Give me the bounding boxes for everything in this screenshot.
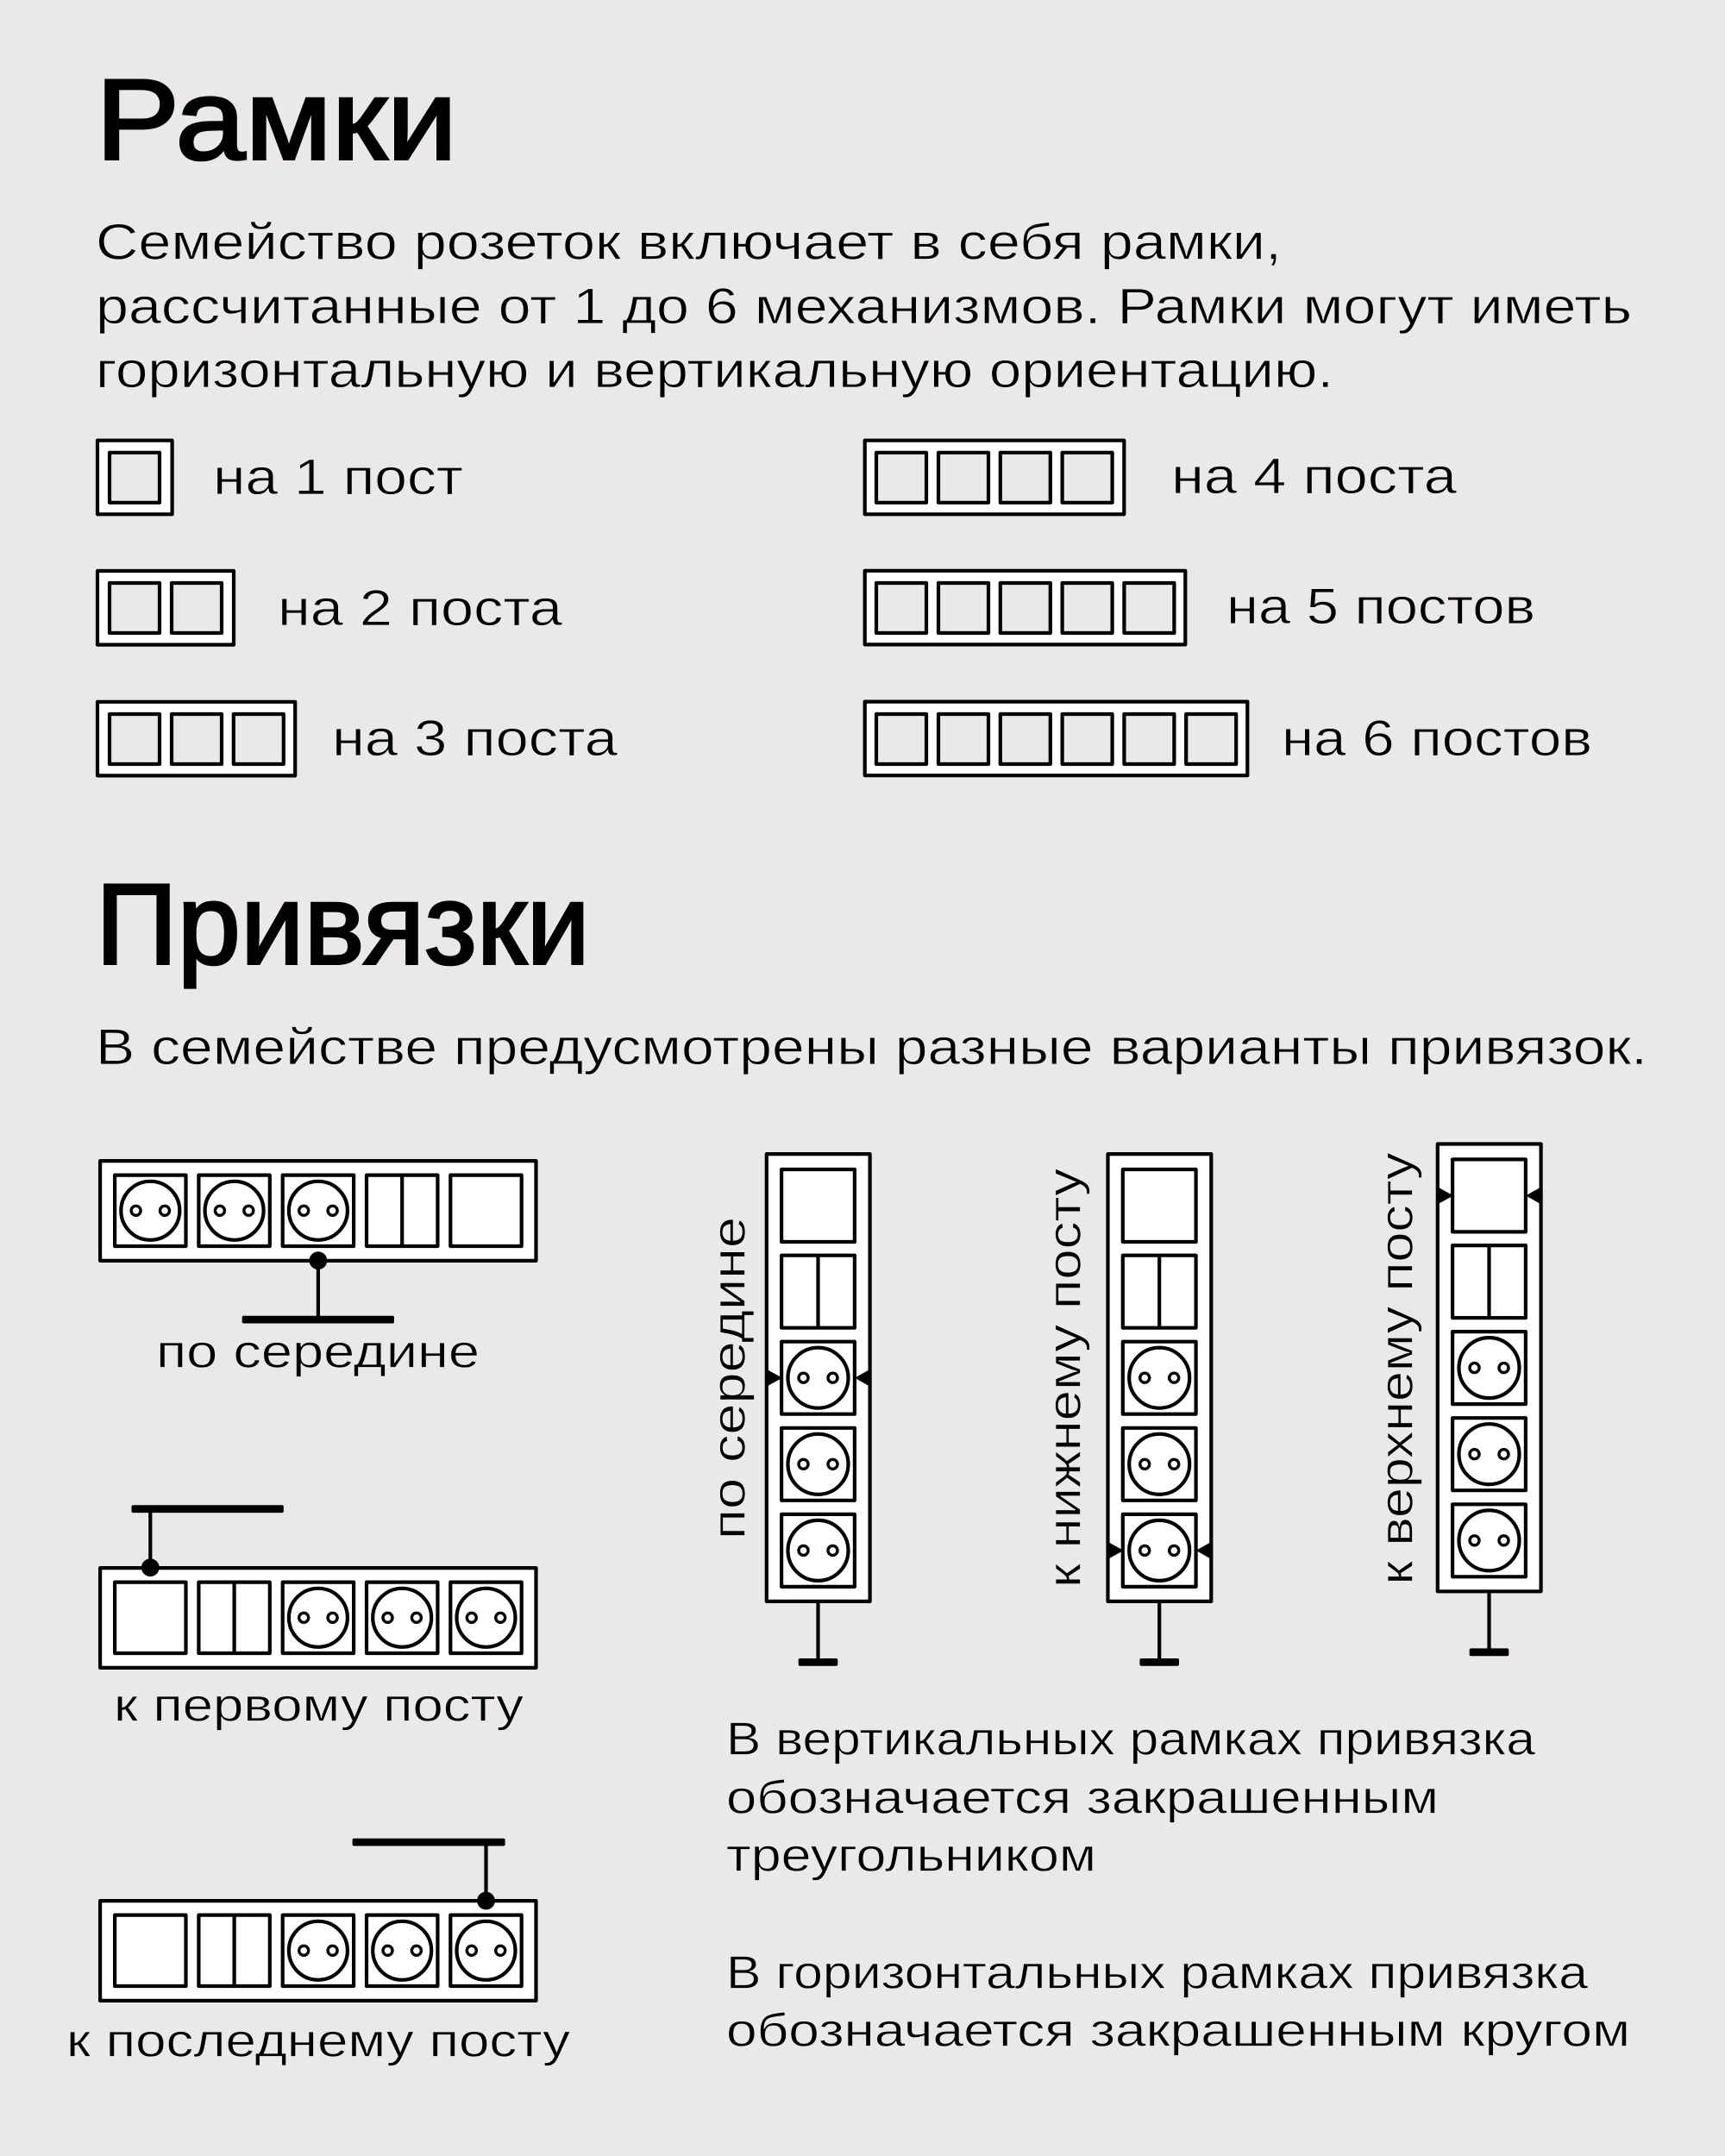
text block: frames description — [96, 215, 1632, 398]
frame: 1 post — [97, 441, 172, 514]
label: 4 posts: на 4 поста — [1171, 448, 1458, 505]
label: last post: к последнему посту — [66, 2015, 570, 2066]
label: 1 post: на 1 пост — [213, 449, 463, 505]
text block: horizontal frames note: В горизонтальных рамках привязка — [726, 1947, 1589, 1999]
label: vertical bottom: к нижнему посту — [1038, 1169, 1090, 1588]
label: middle: по середине — [156, 1326, 480, 1378]
diagram: horizontal frame, anchored at first post — [100, 1505, 536, 1668]
text block: vertical frames note: В вертикальных рамках привязка — [726, 1713, 1536, 1764]
text block: frames description: горизонтальную и вертикальную ориентацию. — [96, 342, 1333, 398]
diagram: horizontal frame, anchored at middle — [100, 1161, 536, 1323]
text block: frames description: Семейство розеток включает в себя рамки, — [96, 215, 1282, 271]
title: Привязки: Привязки — [96, 861, 590, 988]
text block: vertical frames note: обозначается закрашенным — [726, 1771, 1439, 1823]
frame: 5 posts — [865, 571, 1185, 644]
label: 5 posts: на 5 постов — [1226, 579, 1535, 635]
text block: vertical frames note: треугольником — [726, 1830, 1096, 1882]
text block: frames description: рассчитанные от 1 до 6 механизмов. Рамки могут иметь — [96, 279, 1632, 335]
label: 2 posts: на 2 поста — [278, 580, 563, 636]
text block: horizontal frames note: обозначается закрашенным кругом — [726, 2004, 1630, 2056]
text block: anchoring description: В семействе предусмотрены разные варианты привязок. — [96, 1019, 1647, 1075]
label: 3 posts: на 3 поста — [332, 711, 618, 767]
label: vertical middle: по середине — [704, 1217, 756, 1539]
diagram: vertical frame, anchored at top post — [1436, 1144, 1542, 1656]
title: Рамки: Рамки — [96, 57, 457, 185]
diagram: horizontal frame, anchored at last post — [100, 1839, 536, 2001]
label: vertical top: к верхнему посту — [1371, 1152, 1423, 1585]
text block: horizontal frames note — [726, 1947, 1630, 2056]
frame: 6 posts — [865, 702, 1247, 775]
label: 6 posts: на 6 постов — [1282, 711, 1592, 767]
frame: 2 posts — [97, 571, 234, 645]
label: first post: к первому посту — [114, 1680, 524, 1732]
frame: 4 posts — [865, 441, 1124, 514]
panel: frame sizes — [97, 441, 1592, 775]
diagram: vertical frame, anchored at bottom post — [1107, 1154, 1213, 1666]
text block: vertical frames note — [726, 1713, 1536, 1882]
frame: 3 posts — [97, 702, 295, 775]
diagram: vertical frame, anchored at middle — [765, 1154, 871, 1666]
